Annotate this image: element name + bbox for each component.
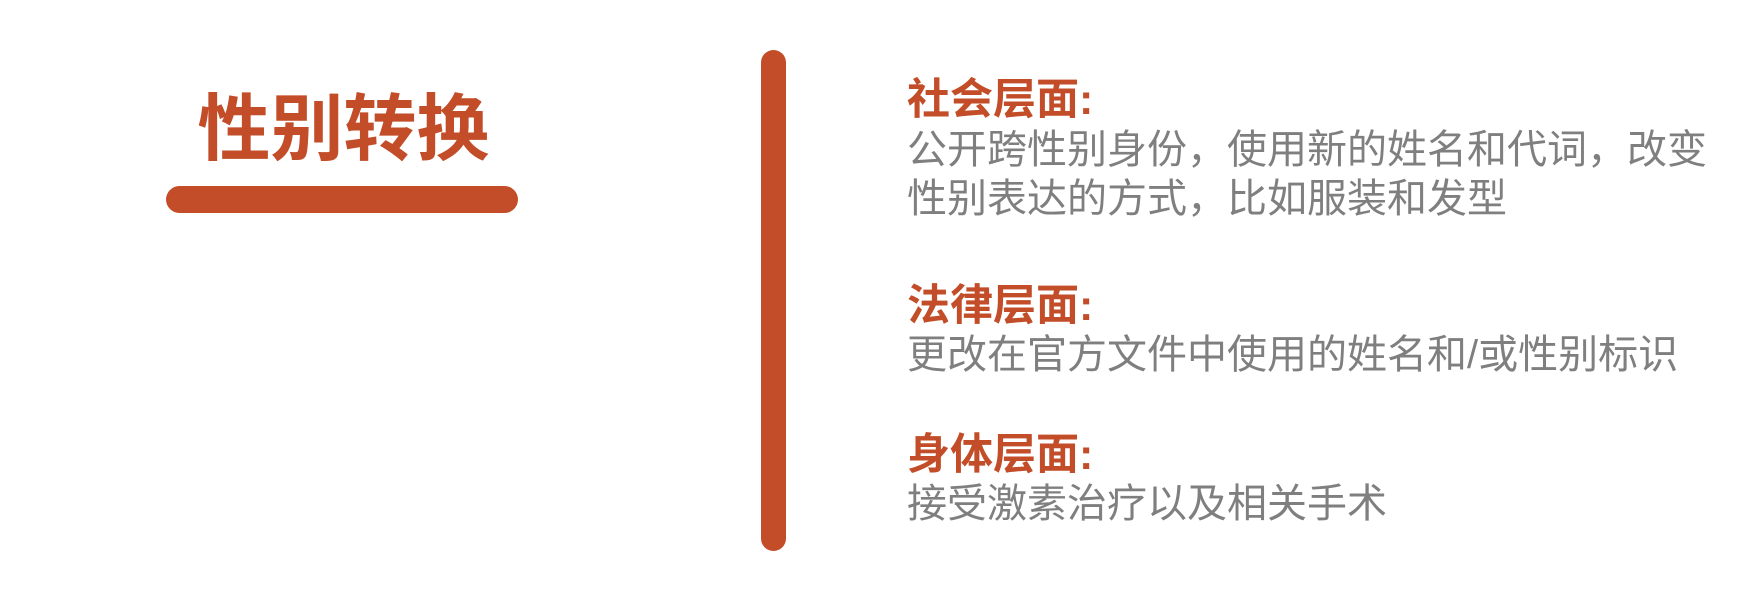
section: social (907, 76, 1707, 221)
title: 性别转换 (198, 89, 490, 170)
text: physical: 接受激素治疗以及相关手术 (907, 482, 1387, 526)
heading: legal: 法律层面: (907, 282, 1093, 330)
text: social: 公开跨性别身份，使用新的姓名和代词，改变 (907, 128, 1707, 172)
section: physical (907, 431, 1387, 526)
heading: social: 社会层面: (907, 76, 1093, 124)
section: legal (907, 282, 1678, 377)
title underline bar (166, 186, 518, 213)
vertical divider (761, 50, 786, 551)
heading: physical: 身体层面: (907, 431, 1093, 479)
text: legal: 更改在官方文件中使用的姓名和/或性别标识 (907, 333, 1678, 377)
text: social: 性别表达的方式，比如服装和发型 (907, 177, 1507, 221)
text: social (907, 128, 1707, 221)
